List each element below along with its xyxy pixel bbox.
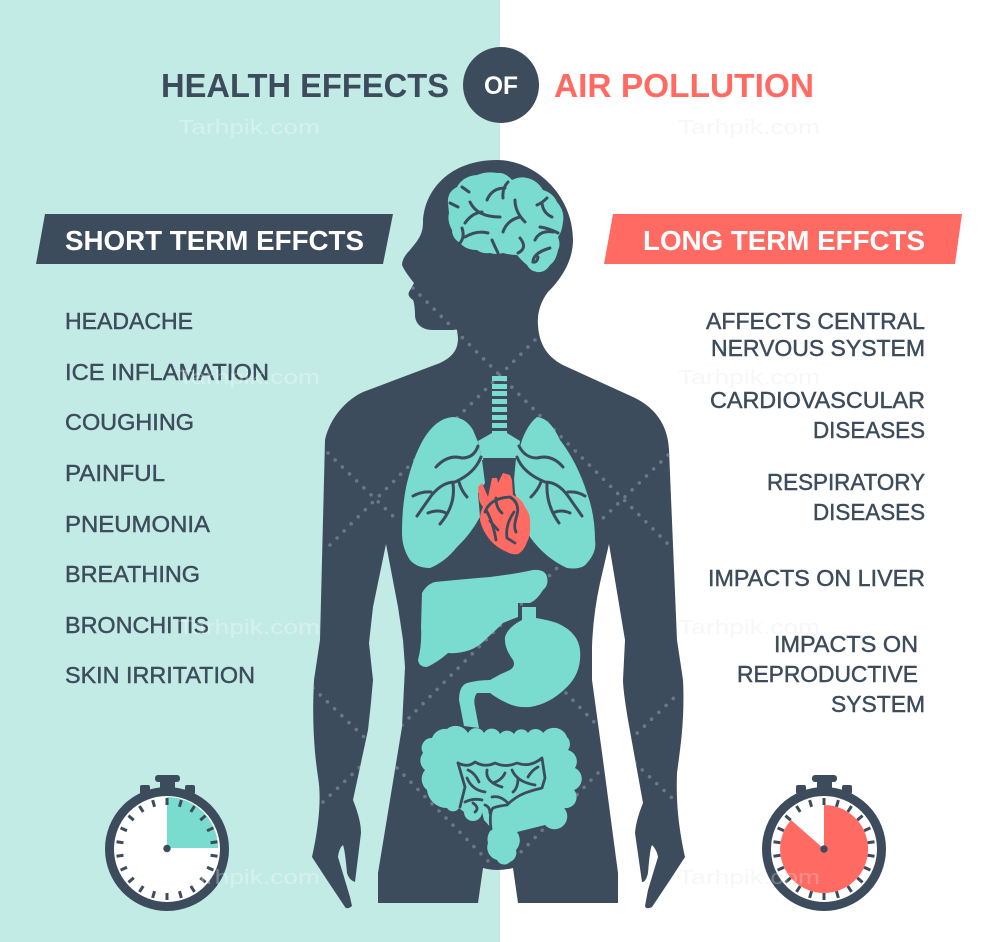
short term effects list: HEADACHE bbox=[65, 308, 193, 334]
long term effects list: SYSTEM bbox=[831, 691, 925, 717]
dark gap behind heart bbox=[483, 458, 516, 495]
short term effects list: COUGHING bbox=[65, 409, 194, 435]
left lung bbox=[402, 417, 485, 568]
bronchi junction bbox=[478, 433, 520, 460]
quarter sector bbox=[167, 797, 218, 848]
icon: stopwatch short term bbox=[110, 775, 224, 906]
long term effects list: AFFECTS CENTRAL bbox=[706, 308, 925, 334]
title left part: HEALTH EFFECTS bbox=[161, 67, 449, 104]
short term effects list bbox=[65, 308, 269, 688]
long term effects list: CARDIOVASCULAR bbox=[710, 387, 925, 413]
watermark text: Tarhpik.com bbox=[178, 617, 320, 639]
human body silhouette bbox=[312, 160, 685, 908]
long term effects list: DISEASES bbox=[813, 499, 925, 525]
icon: trachea bbox=[492, 376, 507, 434]
watermark text: Tarhpik.com bbox=[178, 867, 320, 889]
icon: intestines bbox=[420, 726, 582, 864]
icon: liver bbox=[418, 570, 548, 667]
long term effects list: RESPIRATORY bbox=[767, 469, 925, 495]
watermark text: Tarhpik.com bbox=[678, 367, 820, 389]
long term effects list bbox=[706, 308, 925, 717]
icon: stomach bbox=[459, 607, 580, 728]
watermark text: Tarhpik.com bbox=[678, 867, 820, 889]
short term effects list: ICE INFLAMATION bbox=[65, 359, 269, 385]
long term effects list: IMPACTS ON bbox=[774, 631, 918, 657]
title right part: AIR POLLUTION bbox=[554, 67, 814, 104]
banner: short term effects bbox=[36, 214, 393, 264]
title connector badge bbox=[463, 47, 539, 123]
watermark text: Tarhpik.com bbox=[178, 117, 320, 139]
banner: short term effects: SHORT TERM EFFCTS bbox=[65, 225, 364, 256]
short term effects list: SKIN IRRITATION bbox=[65, 662, 255, 688]
right lung bbox=[513, 417, 595, 568]
long term effects list: NERVOUS SYSTEM bbox=[711, 335, 925, 361]
large sector bbox=[780, 805, 868, 893]
icon: lungs bbox=[402, 417, 595, 568]
icon: brain bbox=[448, 172, 563, 272]
banner: long term effects: LONG TERM EFFCTS bbox=[643, 225, 925, 256]
watermark text: Tarhpik.com bbox=[678, 117, 820, 139]
short term effects list: PNEUMONIA bbox=[65, 511, 211, 537]
short term effects list: BREATHING bbox=[65, 561, 200, 587]
long term effects list: REPRODUCTIVE bbox=[737, 661, 918, 687]
short term effects list: BRONCHITIS bbox=[65, 612, 209, 638]
icon: stopwatch long term bbox=[766, 775, 882, 906]
short term effects list: PAINFUL bbox=[65, 460, 165, 486]
long term effects list: DISEASES bbox=[813, 417, 925, 443]
title connector badge: OF bbox=[484, 72, 518, 100]
title bbox=[161, 47, 814, 123]
long term effects list: IMPACTS ON LIVER bbox=[708, 565, 925, 591]
icon: heart bbox=[478, 473, 530, 554]
watermark text: Tarhpik.com bbox=[178, 367, 320, 389]
banner: long term effects bbox=[604, 214, 962, 264]
watermark text: Tarhpik.com bbox=[678, 617, 820, 639]
left panel background bbox=[0, 0, 500, 942]
watermark text bbox=[178, 117, 820, 889]
